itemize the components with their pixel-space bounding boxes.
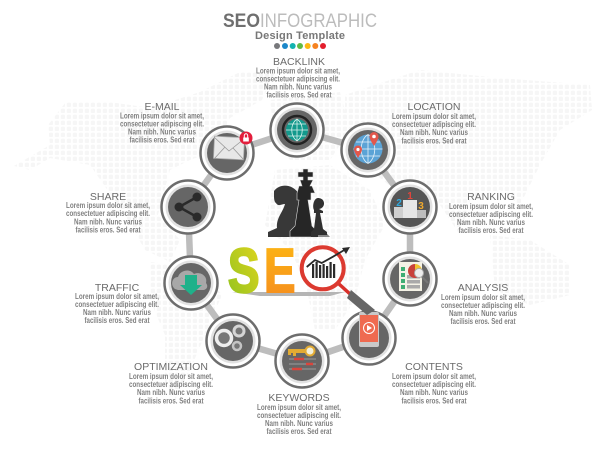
connector ring	[188, 130, 410, 361]
text: backlink: BACKLINK	[273, 56, 325, 68]
text: backlink: facilisis eros. Sed erat	[266, 90, 332, 100]
node: ranking podium: 2	[396, 198, 402, 209]
background world map	[14, 70, 592, 400]
chess pieces	[268, 169, 330, 237]
text: keywords: Lorem ipsum dolor sit amet,	[257, 403, 341, 412]
text: analysis: consectetuer adipiscing elit.	[441, 301, 525, 310]
text: e-mail: Nam nibh. Nunc varius	[128, 128, 196, 136]
text: e-mail: facilisis eros. Sed erat	[130, 136, 195, 144]
text: ranking: RANKING	[467, 191, 515, 203]
text: share	[66, 191, 150, 234]
node: share	[162, 180, 214, 234]
text: contents: consectetuer adipiscing elit.	[392, 380, 476, 389]
text: backlink: Lorem ipsum dolor sit amet,	[256, 66, 340, 76]
text: traffic: consectetuer adipiscing elit.	[75, 300, 159, 309]
title: SEO	[223, 11, 260, 32]
text: ranking: consectetuer adipiscing elit.	[449, 210, 533, 219]
text: share: Nam nibh. Nunc varius	[74, 218, 142, 226]
subtitle: Design Template	[255, 30, 345, 42]
text: analysis: ANALYSIS	[458, 282, 508, 294]
seo shadow	[232, 292, 345, 296]
text: traffic: facilisis eros. Sed erat	[84, 316, 150, 325]
title	[223, 11, 377, 32]
text: e-mail	[120, 101, 204, 144]
text: optimization: Lorem ipsum dolor sit amet,	[129, 372, 213, 381]
text: optimization: OPTIMIZATION	[134, 361, 208, 373]
text: contents: Lorem ipsum dolor sit amet,	[392, 372, 476, 381]
text: backlink: Nam nibh. Nunc varius	[264, 82, 332, 92]
text: contents	[392, 361, 476, 406]
text: backlink: consectetuer adipiscing elit.	[256, 74, 340, 84]
node: keywords key	[276, 334, 328, 388]
text: ranking: Lorem ipsum dolor sit amet,	[449, 202, 533, 211]
text: optimization: Nam nibh. Nunc varius	[137, 388, 205, 397]
text: location: consectetuer adipiscing elit.	[392, 120, 476, 129]
text: location: Lorem ipsum dolor sit amet,	[392, 112, 476, 121]
node: analysis report	[384, 252, 436, 306]
seo letter s: S	[228, 236, 259, 306]
seo letter e: E	[264, 236, 295, 306]
node: backlink globe	[270, 104, 324, 156]
text: ranking: Nam nibh. Nunc varius	[457, 218, 525, 227]
text: e-mail: Lorem ipsum dolor sit amet,	[120, 112, 204, 120]
node: email envelope	[200, 126, 254, 180]
text: traffic: Nam nibh. Nunc varius	[83, 308, 151, 317]
node: ranking podium: 1	[407, 191, 413, 202]
text: keywords: facilisis eros. Sed erat	[266, 427, 332, 436]
text: backlink	[256, 56, 340, 100]
node: ranking podium: 3	[418, 201, 424, 212]
colour dots	[274, 43, 326, 49]
node: contents phone	[342, 312, 396, 364]
node: optimization gears	[206, 314, 260, 368]
text: e-mail: consectetuer adipiscing elit.	[120, 120, 204, 128]
text: traffic	[75, 282, 159, 325]
text: e-mail: E-MAIL	[144, 101, 180, 113]
text: keywords	[257, 392, 341, 436]
text: traffic: Lorem ipsum dolor sit amet,	[75, 292, 159, 301]
text: optimization: facilisis eros. Sed erat	[138, 396, 204, 406]
text: analysis	[441, 282, 525, 326]
node: location globe	[342, 124, 394, 176]
node: ranking podium	[384, 180, 436, 234]
text: optimization	[129, 361, 213, 406]
text: share: consectetuer adipiscing elit.	[66, 209, 150, 218]
text: optimization: consectetuer adipiscing elit.	[129, 380, 213, 389]
magnifier with chart	[302, 247, 375, 315]
text: share: facilisis eros. Sed erat	[76, 226, 141, 234]
text: keywords: Nam nibh. Nunc varius	[265, 419, 333, 428]
text: contents: CONTENTS	[405, 361, 463, 373]
text: analysis: Lorem ipsum dolor sit amet,	[441, 293, 525, 302]
text: analysis: Nam nibh. Nunc varius	[449, 309, 517, 318]
title: INFOGRAPHIC	[260, 11, 377, 32]
text: analysis: facilisis eros. Sed erat	[450, 317, 516, 326]
text: location	[392, 101, 476, 146]
text: location: facilisis eros. Sed erat	[402, 136, 467, 146]
text: keywords: KEYWORDS	[268, 392, 330, 404]
text: ranking	[449, 191, 533, 235]
text: share: SHARE	[90, 191, 126, 203]
text: share: Lorem ipsum dolor sit amet,	[66, 201, 150, 210]
node: traffic cloud	[164, 256, 218, 310]
text: location: Nam nibh. Nunc varius	[400, 128, 468, 137]
text: contents: facilisis eros. Sed erat	[402, 396, 467, 406]
text: location: LOCATION	[408, 101, 460, 113]
text: contents: Nam nibh. Nunc varius	[400, 388, 468, 397]
text: traffic: TRAFFIC	[95, 282, 140, 294]
text: keywords: consectetuer adipiscing elit.	[257, 411, 341, 420]
text: ranking: facilisis eros. Sed erat	[458, 226, 524, 235]
